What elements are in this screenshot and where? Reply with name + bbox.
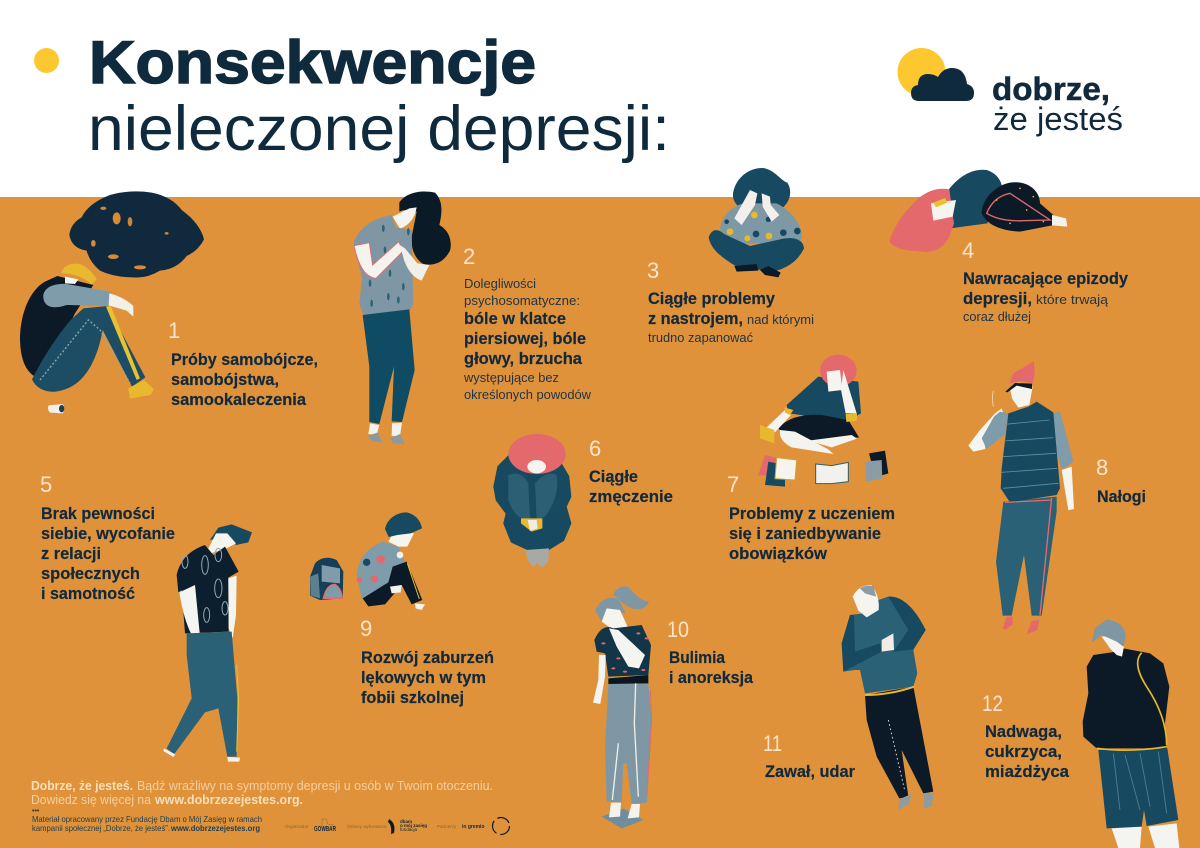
text 12: cukrzyca, (985, 742, 1062, 761)
text 2: występujące bez (463, 370, 559, 385)
footer partner logos: o mój zasięg (400, 823, 427, 828)
text 7: 7 (727, 472, 739, 497)
text 9: lękowych w tym (361, 668, 486, 687)
text 2 (463, 244, 592, 402)
footer call to action: Bądź wrażliwy na symptomy depresji u osób w Twoim otoczeniu. (137, 778, 493, 793)
text 2: określonych powodów (464, 387, 592, 402)
text 1: Próby samobójcze, (171, 350, 318, 369)
text 12: Nadwaga, (985, 722, 1062, 741)
text 5: i samotność (41, 584, 135, 603)
text 10: i anoreksja (669, 668, 754, 687)
figures 3 and 4 (709, 168, 1067, 277)
text 3: trudno zapanować (648, 330, 753, 345)
logo: dobrze, że jesteś: że jesteś (993, 101, 1123, 137)
hair and back (20, 276, 93, 377)
icon: stacked dark books (866, 451, 888, 482)
text 2: głowy, brzucha (464, 349, 583, 368)
figure 5: walking man, hands in pockets (163, 524, 252, 762)
logo: dobrze, że jesteś: dobrze, (992, 71, 1110, 107)
logo: dobrze, że jesteś (898, 48, 1123, 137)
text 1: samobójstwa, (171, 370, 279, 389)
figure 1: seated person under scribble cloud (20, 191, 204, 413)
trousers (32, 306, 145, 392)
text 6: Ciągłe (589, 467, 638, 486)
text 9: fobii szkolnej (361, 688, 464, 707)
icon: school backpack (310, 558, 343, 600)
footer call to action: Dobrze, że jesteś. (31, 778, 133, 793)
text 5: społecznych (41, 564, 140, 583)
text 5: siebie, wycofanie (41, 524, 175, 543)
text 4: depresji, (963, 289, 1032, 308)
text 1: samookaleczenia (171, 390, 307, 409)
figures 11 and 12 (842, 585, 1179, 848)
figure 6: curled person with pink hair (494, 434, 570, 567)
icon: open book (816, 462, 848, 484)
text 1: 1 (168, 318, 180, 343)
text 7: się i zaniedbywanie (729, 524, 881, 543)
trousers (363, 309, 415, 424)
figure 12: overweight man seen from behind (1083, 619, 1179, 848)
footer partner logos: GOWBAR (314, 826, 336, 833)
text 6 (589, 436, 673, 506)
text 12: miażdżyca (985, 762, 1070, 781)
icon: pile of notebooks (758, 455, 797, 487)
text 3: nad którymi (747, 312, 814, 327)
text 5: 5 (40, 472, 52, 497)
footer partner logos: in gremio (462, 824, 485, 830)
text 4: 4 (962, 238, 974, 263)
text 9 (360, 616, 494, 707)
text 11: 11 (763, 731, 782, 756)
title (88, 29, 670, 164)
text 11 (763, 731, 855, 781)
icon: dark scribble cloud (69, 191, 204, 278)
text 3: 3 (647, 258, 659, 283)
text 3: Ciągłe problemy (648, 289, 776, 308)
text 10 (667, 617, 754, 687)
text 10: 10 (667, 617, 689, 642)
text 2: 2 (463, 244, 475, 269)
text 8 (1096, 455, 1146, 506)
text 2: psychosomatyczne: (464, 293, 580, 308)
text 5 (40, 472, 175, 603)
text 4: które trwają (1036, 292, 1109, 307)
figure 3: person cross-legged covering face (709, 168, 804, 277)
text 9: Rozwój zaburzeń (361, 648, 494, 667)
shoe (128, 380, 154, 399)
sleeve (43, 284, 111, 307)
cap (61, 264, 97, 284)
face (65, 277, 78, 284)
text 4: coraz dłużej (963, 309, 1031, 324)
figure 2: standing person with long hair (354, 192, 451, 444)
text 7 (727, 472, 895, 563)
footer credits (32, 814, 262, 833)
hair (399, 192, 451, 265)
figures 5 and 9 (163, 512, 425, 762)
text 9: 9 (360, 616, 372, 641)
text 3: z nastrojem, (648, 309, 743, 328)
footer call to action: www.dobrzezejestes.org. (154, 792, 303, 807)
face (393, 207, 417, 229)
text 6: zmęczenie (589, 487, 673, 506)
shirt (354, 215, 413, 315)
figure 8: man smoking in pink hat (968, 361, 1074, 634)
icon: yellow book (760, 425, 774, 443)
text 2: bóle w klatce (464, 309, 566, 328)
socks and shoes (368, 423, 402, 436)
text 2: Dolegliwości (464, 276, 536, 291)
footer partner logos: dbam (400, 819, 412, 824)
yellow title bullet (34, 48, 59, 73)
text 7: obowiązków (729, 544, 828, 563)
footer credits: Materiał opracowany przez Fundację Dbam o Mój Zasięg w ramach (32, 814, 262, 824)
text 5: z relacji (41, 544, 101, 563)
footer partner logos: fundacja (400, 827, 418, 832)
footer partner logos: Główny wykonawca (347, 824, 387, 829)
text 12 (982, 691, 1070, 781)
text 2: piersiowej, bóle (464, 329, 586, 348)
orange background panel (0, 197, 1200, 848)
footer credits: www.dobrzezejestes.org (170, 823, 260, 833)
text 12: 12 (982, 691, 1003, 716)
figure 7: person with books (758, 355, 888, 487)
hand (109, 293, 133, 317)
footer partner logos (285, 818, 510, 834)
footer partner logos: Partnerzy (437, 824, 457, 829)
pill bottle (48, 404, 64, 413)
text 11: Zawał, udar (765, 762, 855, 781)
text 8: 8 (1096, 455, 1108, 480)
title: Konsekwencje (89, 29, 536, 96)
figures 6 and 7 (494, 355, 888, 567)
text 1 (168, 318, 318, 409)
footer call to action: Dowiedz się więcej na (31, 792, 152, 807)
footer call to action (31, 778, 493, 815)
text 3 (647, 258, 814, 345)
figure 9: crouching child (357, 512, 425, 610)
text 5: Brak pewności (41, 504, 155, 523)
arms praying (354, 242, 403, 278)
text 4 (962, 238, 1129, 324)
text 10: Bulimia (669, 648, 725, 667)
text 7: Problemy z uczeniem (729, 504, 895, 523)
title: nieleczonej depresji: (88, 94, 670, 164)
footer credits: kampanii społecznej „Dobrze, że jesteś”. (32, 823, 170, 833)
footer call to action: ••• (32, 808, 40, 815)
text 4: Nawracające epizody (963, 269, 1129, 288)
text 8: Nałogi (1097, 487, 1146, 506)
footer partner logos: Organizator (285, 824, 309, 829)
text 6: 6 (589, 436, 601, 461)
figure 11: heavy older man holding chest (842, 585, 934, 810)
figure 4: person lying down with pink hair (889, 170, 1067, 252)
figure 10: girl on a scale (593, 586, 652, 828)
